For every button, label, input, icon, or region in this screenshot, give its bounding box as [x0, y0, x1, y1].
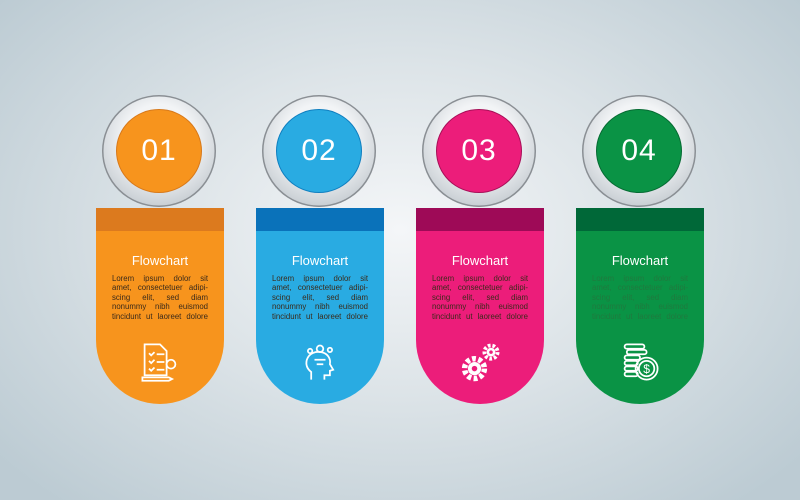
step 1 ring: [102, 95, 216, 207]
card 1: [96, 208, 224, 404]
text 2: tincidunt ut laoreet dolore: [272, 312, 368, 321]
number 03: [436, 109, 522, 193]
text 1: [112, 274, 208, 321]
number 01: [116, 109, 202, 193]
text 4: scing elit, sed diam: [592, 293, 688, 302]
title 1: Flowchart: [132, 253, 188, 268]
card 2: [256, 208, 384, 404]
title 3: Flowchart: [452, 253, 508, 268]
step 4 ring: [582, 95, 696, 207]
text 4: Lorem ipsum dolor sit: [592, 274, 688, 283]
card 4: [576, 208, 704, 404]
number 02: [276, 109, 362, 193]
icon: checklist: [142, 344, 176, 382]
card 3: [416, 208, 544, 404]
text 4: [592, 274, 688, 321]
text 4: amet, consectetuer adipi-: [592, 283, 688, 292]
text 3: scing elit, sed diam: [432, 293, 528, 302]
text 4: tincidunt ut laoreet dolore: [592, 312, 688, 321]
number 02: 02: [301, 134, 337, 167]
text 1: Lorem ipsum dolor sit: [112, 274, 208, 283]
title 4: Flowchart: [612, 253, 668, 268]
text 3: nonummy nibh euismod: [432, 302, 528, 311]
text 4: nonummy nibh euismod: [592, 302, 688, 311]
number 03: 03: [461, 134, 497, 167]
icon: coins: $: [643, 362, 650, 376]
text 3: [432, 274, 528, 321]
text 2: [272, 274, 368, 321]
icon: coins: [624, 344, 658, 380]
step 3 ring: [422, 95, 536, 207]
text 2: Lorem ipsum dolor sit: [272, 274, 368, 283]
title 2: Flowchart: [292, 253, 348, 268]
number 04: [596, 109, 682, 193]
text 3: amet, consectetuer adipi-: [432, 283, 528, 292]
icon: gears: [462, 344, 500, 382]
text 1: scing elit, sed diam: [112, 293, 208, 302]
text 2: amet, consectetuer adipi-: [272, 283, 368, 292]
text 1: nonummy nibh euismod: [112, 302, 208, 311]
text 1: amet, consectetuer adipi-: [112, 283, 208, 292]
number 01: 01: [141, 134, 177, 167]
icon: head ideas: [306, 344, 334, 380]
number 04: 04: [621, 134, 657, 167]
text 1: tincidunt ut laoreet dolore: [112, 312, 208, 321]
text 2: scing elit, sed diam: [272, 293, 368, 302]
text 3: tincidunt ut laoreet dolore: [432, 312, 528, 321]
text 3: Lorem ipsum dolor sit: [432, 274, 528, 283]
text 2: nonummy nibh euismod: [272, 302, 368, 311]
step 2 ring: [262, 95, 376, 207]
